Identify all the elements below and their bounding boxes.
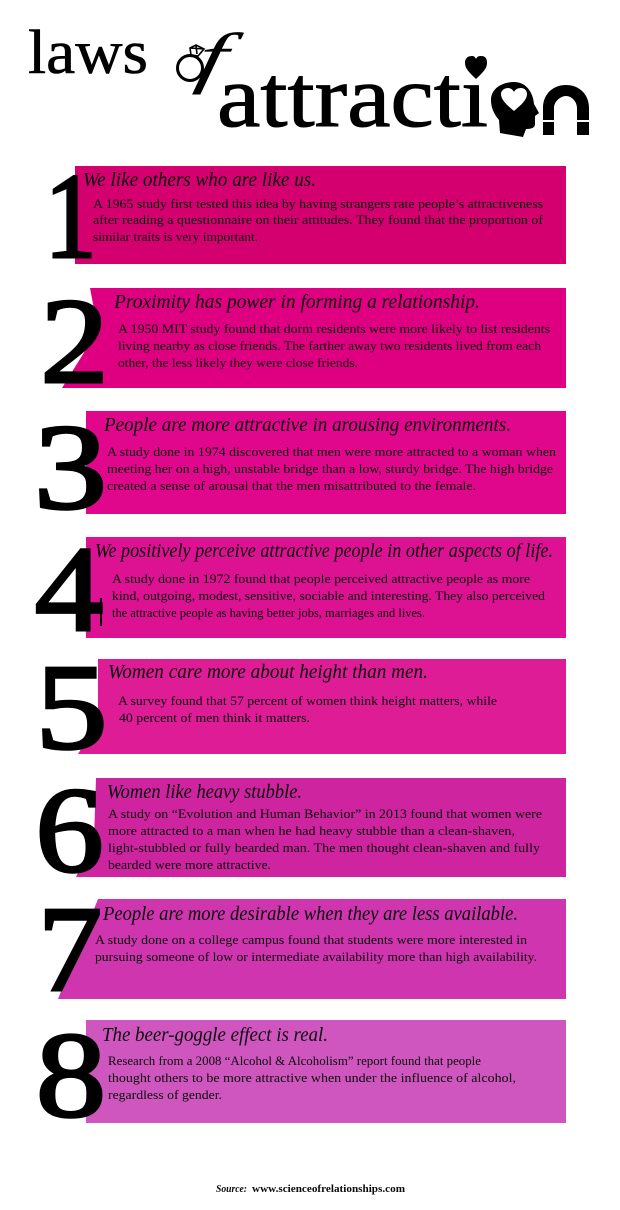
body 2: A 1950 MIT study found that dorm residents were more likely to list residents <box>118 322 550 336</box>
body 1: A 1965 study first tested this idea by having strangers rate people’s attractiveness <box>93 197 543 211</box>
body 6: bearded were more attractive. <box>108 858 271 872</box>
title word: of with ring icon <box>178 19 248 95</box>
body 3: A study done in 1974 discovered that men were more attracted to a woman when <box>107 445 557 459</box>
body 5 <box>118 694 497 725</box>
body 5: A survey found that 57 percent of women think height matters, while <box>118 694 497 708</box>
number 2: 2 <box>40 275 109 409</box>
body 8: Research from a 2008 “Alcohol & Alcoholism” report found that people <box>108 1054 481 1068</box>
heading 7: People are more desirable when they are less available. <box>102 904 518 925</box>
source line: www.scienceofrelationships.com <box>252 1183 405 1195</box>
body 7: A study done on a college campus found that students were more interested in <box>95 933 528 947</box>
number 4: 4 <box>35 523 103 657</box>
heading 1: We like others who are like us. <box>83 170 316 191</box>
title <box>28 19 589 146</box>
body 7 <box>95 933 537 964</box>
body 1: after reading a questionnaire on their attitudes. They found that the proportion of <box>93 213 544 227</box>
heading 3: People are more attractive in arousing environments. <box>103 415 511 436</box>
number 1: 1 <box>45 149 96 284</box>
heading 5: Women care more about height than men. <box>108 662 428 683</box>
heading 2: Proximity has power in forming a relationship. <box>113 292 480 313</box>
number 4 serif <box>86 598 101 626</box>
body 3: meeting her on a high, unstable bridge than a low, sturdy bridge. The high bridge <box>107 462 553 476</box>
body 4: kind, outgoing, modest, sensitive, sociable and interesting. They also perceived <box>112 589 546 603</box>
body 4: A study done in 1972 found that people perceived attractive people as more <box>112 572 530 586</box>
panel: law 7 <box>38 883 566 1017</box>
body 6 <box>108 807 542 872</box>
panel: law 8 <box>36 1008 566 1143</box>
body 8: thought others to be more attractive when under the influence of alcohol, <box>108 1071 516 1085</box>
body 7: pursuing someone of low or intermediate availability more than high availability. <box>95 950 537 964</box>
number 6: 6 <box>35 764 104 898</box>
body 6: light-stubbled or fully bearded man. The men thought clean-shaven and fully <box>108 841 541 855</box>
body 4 <box>112 572 546 620</box>
panel: law 4 <box>35 523 566 657</box>
body 8 <box>108 1054 516 1102</box>
body 5: 40 percent of men think it matters. <box>119 711 310 725</box>
body 1: similar traits is very important. <box>93 230 258 244</box>
number 5: 5 <box>36 639 107 775</box>
body 3 <box>107 445 557 493</box>
number 8: 8 <box>36 1008 106 1143</box>
panel: law 3 <box>34 400 566 535</box>
body 6: A study on “Evolution and Human Behavior” in 2013 found that women were <box>108 807 542 821</box>
title word: of with ring icon: f <box>191 19 248 95</box>
title word: laws: laws <box>28 19 148 87</box>
icon: heart above i <box>464 52 490 81</box>
body 1 <box>93 197 544 244</box>
heading 8: The beer-goggle effect is real. <box>102 1025 328 1046</box>
body 4: the attractive people as having better jobs, marriages and lives. <box>112 606 425 620</box>
body 8: regardless of gender. <box>108 1088 222 1102</box>
source line: Source: <box>216 1183 247 1195</box>
panel: law 1 <box>45 149 566 284</box>
body 2: living nearby as close friends. The farther away two residents lived from each <box>118 339 542 353</box>
heading 4: We positively perceive attractive people in other aspects of life. <box>95 541 553 562</box>
panel: law 6 <box>35 764 566 898</box>
panel: law 5 <box>36 639 566 775</box>
heading 6: Women like heavy stubble. <box>107 782 302 803</box>
body 2 <box>118 322 550 370</box>
title word: attraction: attracti <box>217 49 488 146</box>
body 3: created a sense of arousal that the men misattributed to the female. <box>107 479 476 493</box>
body 2: other, the less likely they were close friends. <box>118 356 358 370</box>
icon: magnet <box>543 85 589 135</box>
icon: head with heart <box>491 82 539 137</box>
number 7: 7 <box>38 883 102 1017</box>
number 3: 3 <box>34 400 107 535</box>
panel: law 2 <box>40 275 566 409</box>
body 6: more attracted to a man when he had heavy stubble than a clean-shaven, <box>108 824 515 838</box>
